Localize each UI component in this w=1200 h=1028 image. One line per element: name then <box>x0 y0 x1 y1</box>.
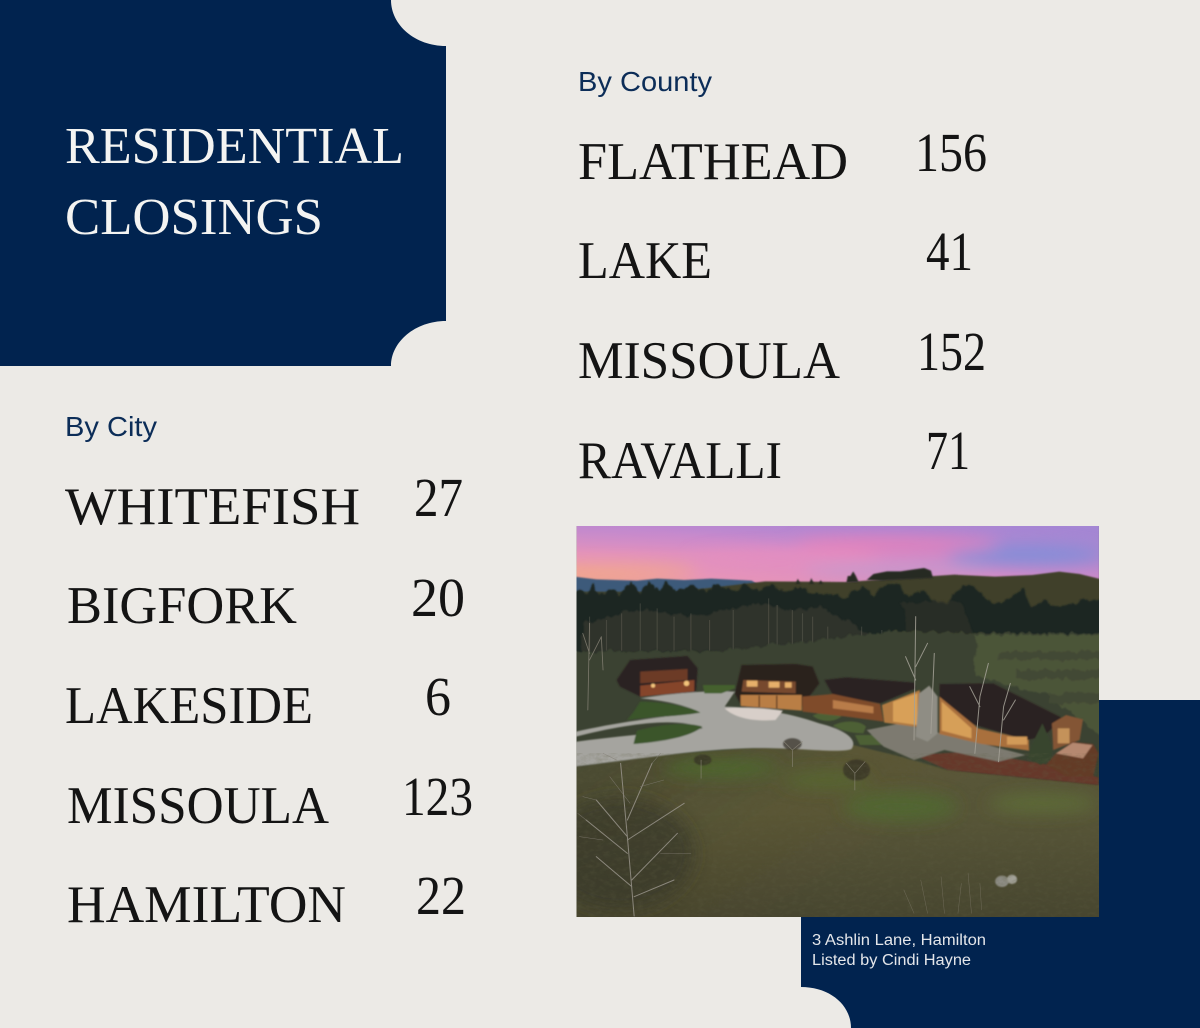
left window wall <box>882 690 920 727</box>
panel: navy corner block <box>801 700 1200 1028</box>
mulch bed <box>914 752 1099 785</box>
lawn <box>576 745 1099 917</box>
driveway <box>569 691 853 767</box>
row: Flathead: 156 <box>915 122 987 183</box>
row: Lake: 41 <box>926 221 973 282</box>
row: Missoula: 123 <box>402 766 473 827</box>
forest <box>569 580 1107 652</box>
deck <box>1046 742 1099 777</box>
ridge trees <box>796 568 933 584</box>
birch clump <box>916 686 938 742</box>
heading: by city: By City <box>65 411 157 442</box>
title: RESIDENTIAL <box>65 118 404 175</box>
guest garage <box>617 656 698 697</box>
row: Missoula <box>578 321 986 390</box>
row: Bigfork <box>67 567 465 635</box>
caption: Listed by Cindi Hayne <box>812 952 971 969</box>
right roof <box>939 683 1063 740</box>
middle wing <box>824 677 916 703</box>
panel: title block <box>0 0 446 366</box>
grass islands <box>627 702 700 720</box>
title: CLOSINGS <box>65 189 323 246</box>
distant mountains <box>569 576 769 592</box>
heading: by county: By County <box>578 66 712 97</box>
row: Bigfork: BIGFORK <box>67 577 297 635</box>
panel: by county <box>578 66 987 490</box>
sky <box>576 526 1099 584</box>
property <box>569 656 1099 887</box>
caption: 3 Ashlin Lane, Hamilton <box>812 932 986 949</box>
caption <box>812 932 986 969</box>
lawn grain <box>577 753 1084 884</box>
row: Hamilton: HAMILTON <box>67 876 346 934</box>
panel: by city <box>65 411 473 934</box>
bare tree haze in the forest <box>583 600 975 652</box>
row: Missoula <box>67 766 473 835</box>
row: Hamilton: 22 <box>416 865 466 926</box>
rocks <box>995 876 1009 887</box>
row: Whitefish: WHITEFISH <box>65 478 360 536</box>
row: Flathead <box>578 122 987 191</box>
row: Ravalli <box>578 420 970 490</box>
row: Ravalli: 71 <box>926 420 970 481</box>
row: Hamilton <box>67 865 466 934</box>
row: Lakeside <box>65 666 451 735</box>
row: Bigfork: 20 <box>411 567 465 628</box>
row: Whitefish: 27 <box>414 467 463 528</box>
hills <box>698 570 1099 605</box>
bare trees <box>578 617 1015 916</box>
meadow <box>569 632 1107 790</box>
row: Lake <box>578 221 973 290</box>
row: Whitefish <box>65 467 463 536</box>
row: Missoula: 152 <box>917 321 986 382</box>
row: Ravalli: RAVALLI <box>578 432 782 490</box>
right window wall <box>939 697 1029 751</box>
shrub <box>1027 723 1053 765</box>
small trees on lawn <box>694 738 870 781</box>
row: Missoula: MISSOULA <box>578 332 840 390</box>
end gable <box>1052 715 1083 750</box>
row: Lakeside: LAKESIDE <box>65 677 313 735</box>
row: Lakeside: 6 <box>425 666 451 727</box>
title <box>65 118 404 246</box>
forest-edge trunks <box>589 598 882 652</box>
row: Lake: LAKE <box>578 232 712 290</box>
main house <box>735 664 819 710</box>
photo: aerial view of lodge at dusk <box>576 526 1099 917</box>
row: Flathead: FLATHEAD <box>578 133 848 191</box>
row: Missoula: MISSOULA <box>67 777 329 835</box>
